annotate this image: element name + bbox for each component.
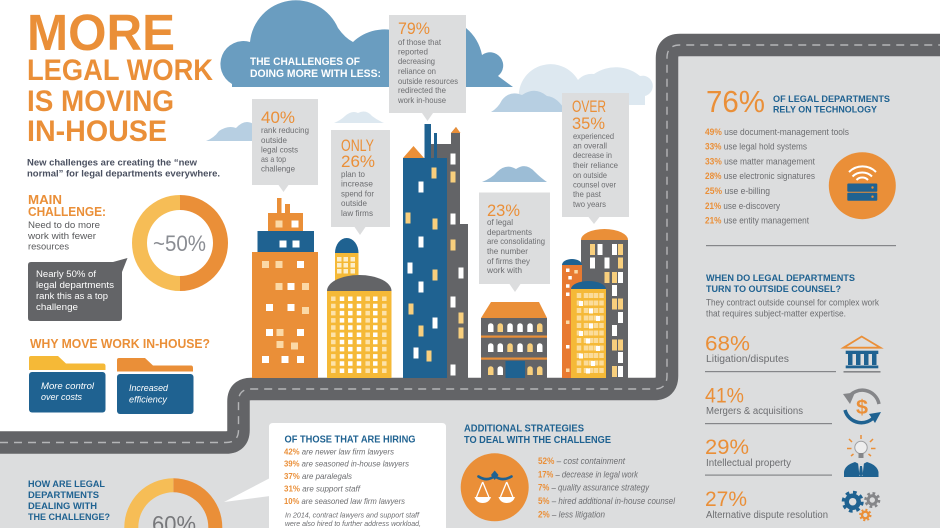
callout: 40%: challenge	[261, 164, 295, 174]
main challenge text: CHALLENGE:	[28, 205, 106, 219]
subtitle: normal” for legal departments everywhere.	[27, 168, 220, 180]
callout: 23%	[479, 192, 550, 292]
heading: additional strategies: ADDITIONAL STRATEGIES	[464, 424, 584, 435]
callout: 40%: rank reducing	[261, 125, 309, 135]
strategies list: 17% – decrease in legal work	[538, 469, 638, 479]
strategies list: 5% – hired additional in-house counsel	[538, 496, 676, 506]
stat: 27% alternative dispute resolution: Alternative dispute resolution	[706, 510, 828, 521]
callout: over 35%: OVER	[572, 98, 606, 116]
folder: increased efficiency: efficiency	[129, 394, 167, 404]
stat: 41% mergers	[705, 385, 832, 424]
callout: 23%: are consolidating	[487, 236, 545, 246]
heading: how are legal departments: DEALING WITH	[28, 501, 97, 512]
hiring note	[285, 510, 421, 528]
callout: only 26%	[331, 130, 390, 235]
callout: only 26%: increase	[341, 179, 373, 189]
callout: 79%: work in-house	[397, 95, 446, 105]
heading: rely on technology: RELY ON TECHNOLOGY	[773, 104, 878, 116]
callout: 79%: reliance on	[398, 66, 436, 76]
main challenge text: Need to do more	[28, 220, 100, 231]
main challenge text	[27, 193, 106, 252]
building: cluster right	[562, 229, 628, 378]
heading: when do legal departments	[706, 273, 855, 295]
heading: additional strategies	[464, 424, 611, 446]
folder: increased efficiency	[117, 358, 194, 414]
strategies list: 2% – less litigation	[538, 509, 605, 519]
heading: when do legal departments: WHEN DO LEGAL DEPARTMENTS	[706, 273, 855, 284]
subtitle	[27, 158, 220, 180]
icon: lightbulb head	[844, 435, 878, 477]
heading: when do legal departments: TURN TO OUTSIDE COUNSEL?	[706, 284, 841, 295]
technology list: 49% use document-management tools	[705, 127, 849, 137]
main challenge text: resources	[28, 242, 69, 252]
callout: over 35%: their reliance	[573, 160, 618, 170]
heading: rely on technology: OF LEGAL DEPARTMENTS	[773, 94, 890, 105]
callout: 79%: redirected the	[398, 85, 446, 95]
cloud: left	[206, 122, 256, 141]
subtitle: New challenges are creating the “new	[27, 158, 198, 168]
callout: nearly 50%: challenge	[36, 302, 78, 313]
title: LEGAL WORK	[27, 54, 213, 87]
intro text: They contract outside counsel for complex work	[706, 298, 879, 308]
folder: increased efficiency: Increased	[129, 383, 169, 393]
intro text	[706, 298, 879, 319]
stat: 68% litigation: Litigation/disputes	[706, 354, 789, 365]
technology list: 25% use e-billing	[705, 186, 770, 196]
callout: over 35%: counsel over	[573, 180, 616, 190]
stat: 76%: 76%	[706, 84, 765, 119]
callout: nearly 50%	[28, 258, 128, 321]
stat: 29% intellectual property: 29%	[705, 436, 749, 459]
cloud with heading: the challenges: THE CHALLENGES OF	[250, 56, 360, 68]
cloud: low right	[482, 166, 547, 182]
callout: over 35%: 35%	[572, 115, 605, 133]
stat: 29% intellectual property: Intellectual property	[706, 458, 791, 469]
main challenge text: work with fewer	[27, 231, 96, 242]
strategies list	[538, 456, 676, 519]
road	[0, 45, 940, 442]
callout: 79%: reported	[398, 46, 428, 56]
callout: only 26%: plan to	[341, 169, 365, 179]
technology list: 28% use electronic signatures	[705, 171, 815, 181]
donut chart: ~50%: ~50%	[153, 231, 206, 256]
technology list	[705, 127, 849, 226]
stat: 27% alternative dispute resolution: 27%	[705, 488, 747, 511]
callout: nearly 50%: Nearly 50% of	[36, 269, 96, 280]
icon: dollar exchange	[843, 390, 881, 423]
callout: 40%: 40%	[261, 109, 295, 127]
cloud with heading: the challenges	[220, 0, 513, 87]
hiring list: 10% are seasoned law firm lawyers	[284, 496, 406, 506]
hiring list: 39% are seasoned in-house lawyers	[284, 459, 410, 469]
panel: technology	[705, 84, 896, 521]
heading: how are legal departments: DEPARTMENTS	[28, 490, 99, 501]
cloud with heading: the challenges: DOING MORE WITH LESS:	[250, 68, 381, 80]
callout: nearly 50%: rank this as a top	[36, 291, 108, 302]
callout: 40%: legal costs	[261, 144, 298, 154]
callout: only 26%: 26%	[341, 153, 375, 171]
building: yellow domed tower	[327, 238, 392, 378]
main challenge text: MAIN	[28, 193, 62, 207]
icon: scales	[461, 453, 529, 521]
callout: over 35%: on outside	[573, 170, 607, 180]
callout: 40%: as a top	[261, 154, 286, 164]
hiring note: In 2014, contract lawyers and support staff	[285, 510, 420, 520]
panel: of those that are hiring	[224, 423, 446, 528]
title: IS MOVING	[27, 85, 174, 118]
heading: why move work in-house: WHY MOVE WORK IN-HOUSE?	[30, 337, 210, 351]
technology list: 21% use entity management	[705, 216, 809, 226]
callout: over 35%	[562, 93, 629, 224]
callout: over 35%: an overall	[573, 141, 607, 151]
callout: nearly 50%: legal departments	[36, 280, 114, 291]
icon: courthouse	[844, 336, 880, 373]
callout: 23%: the number	[487, 246, 528, 256]
heading: how are legal departments: THE CHALLENGE?	[28, 512, 110, 523]
callout: over 35%: decrease in	[573, 150, 612, 160]
callout: 40%	[252, 99, 318, 192]
hiring list: 42% are newer law firm lawyers	[284, 446, 395, 456]
technology list: 33% use matter management	[705, 156, 815, 166]
callout: 79%: outside resources	[398, 76, 458, 86]
folder: more control over costs: More control	[41, 381, 95, 391]
intro text: that requires subject-matter expertise.	[706, 309, 846, 319]
title: MORE	[27, 4, 175, 61]
heading: how are legal departments: HOW ARE LEGAL	[28, 479, 105, 490]
cloud: mid right	[491, 91, 566, 112]
building: low gray with orange roof	[481, 302, 547, 378]
heading: rely on technology	[773, 94, 890, 116]
title: IN-HOUSE	[27, 115, 167, 148]
building: orange tower	[252, 198, 318, 378]
stat: 41% mergers: 41%	[705, 385, 744, 408]
callout: 23%: 23%	[487, 202, 520, 220]
title	[27, 4, 213, 148]
heading: how are legal departments	[28, 479, 110, 523]
icon: wifi server	[829, 152, 896, 219]
technology list: 33% use legal hold systems	[705, 142, 807, 152]
stat: 68% litigation	[705, 333, 836, 372]
stat: 29% intellectual property	[705, 436, 832, 476]
callout: only 26%: law firms	[341, 208, 373, 218]
callout: 23%: departments	[487, 227, 532, 237]
technology list: 21% use e-discovery	[705, 201, 780, 211]
donut chart: 60%	[124, 478, 222, 528]
callout: 23%: of legal	[487, 217, 513, 227]
stat: 27% alternative dispute resolution	[705, 488, 828, 521]
callout: only 26%: outside	[341, 198, 367, 208]
hiring list: 31% are support staff	[284, 484, 362, 494]
building: tall blue tower	[403, 124, 468, 378]
callout: 79%: of those that	[398, 37, 442, 47]
callout: over 35%: the past	[573, 189, 602, 199]
stat: 68% litigation: 68%	[705, 333, 750, 356]
callout: 23%: work with	[486, 265, 522, 275]
callout: over 35%: two years	[573, 199, 606, 209]
callout: 79%: 79%	[398, 20, 430, 38]
callout: 23%: of firms they	[487, 256, 531, 266]
donut chart: ~50%	[132, 195, 228, 291]
hiring note: were also hired to further address workload,	[285, 519, 421, 528]
callout: only 26%: ONLY	[341, 137, 374, 155]
stat: 41% mergers: Mergers & acquisitions	[706, 406, 803, 417]
callout: only 26%: spend for	[341, 188, 374, 198]
callout: 79%: decreasing	[398, 56, 435, 66]
callout: 79%	[389, 15, 466, 121]
hiring list	[284, 446, 410, 506]
heading: hiring: OF THOSE THAT ARE HIRING	[284, 435, 416, 446]
folder: more control over costs: over costs	[41, 392, 82, 402]
cloud: faint centre	[334, 112, 384, 123]
icon: gears	[843, 492, 879, 520]
callout: over 35%: experienced	[573, 131, 614, 141]
icon: dollar exchange: $	[856, 397, 868, 419]
callout: 40%: outside	[261, 135, 287, 145]
strategies list: 52% – cost containment	[538, 456, 625, 466]
hiring list: 37% are paralegals	[284, 471, 353, 481]
folder: more control over costs	[29, 356, 106, 412]
heading: additional strategies: TO DEAL WITH THE CHALLENGE	[464, 435, 611, 446]
strategies list: 7% – quality assurance strategy	[538, 483, 649, 493]
cloud: faint right	[519, 64, 653, 112]
